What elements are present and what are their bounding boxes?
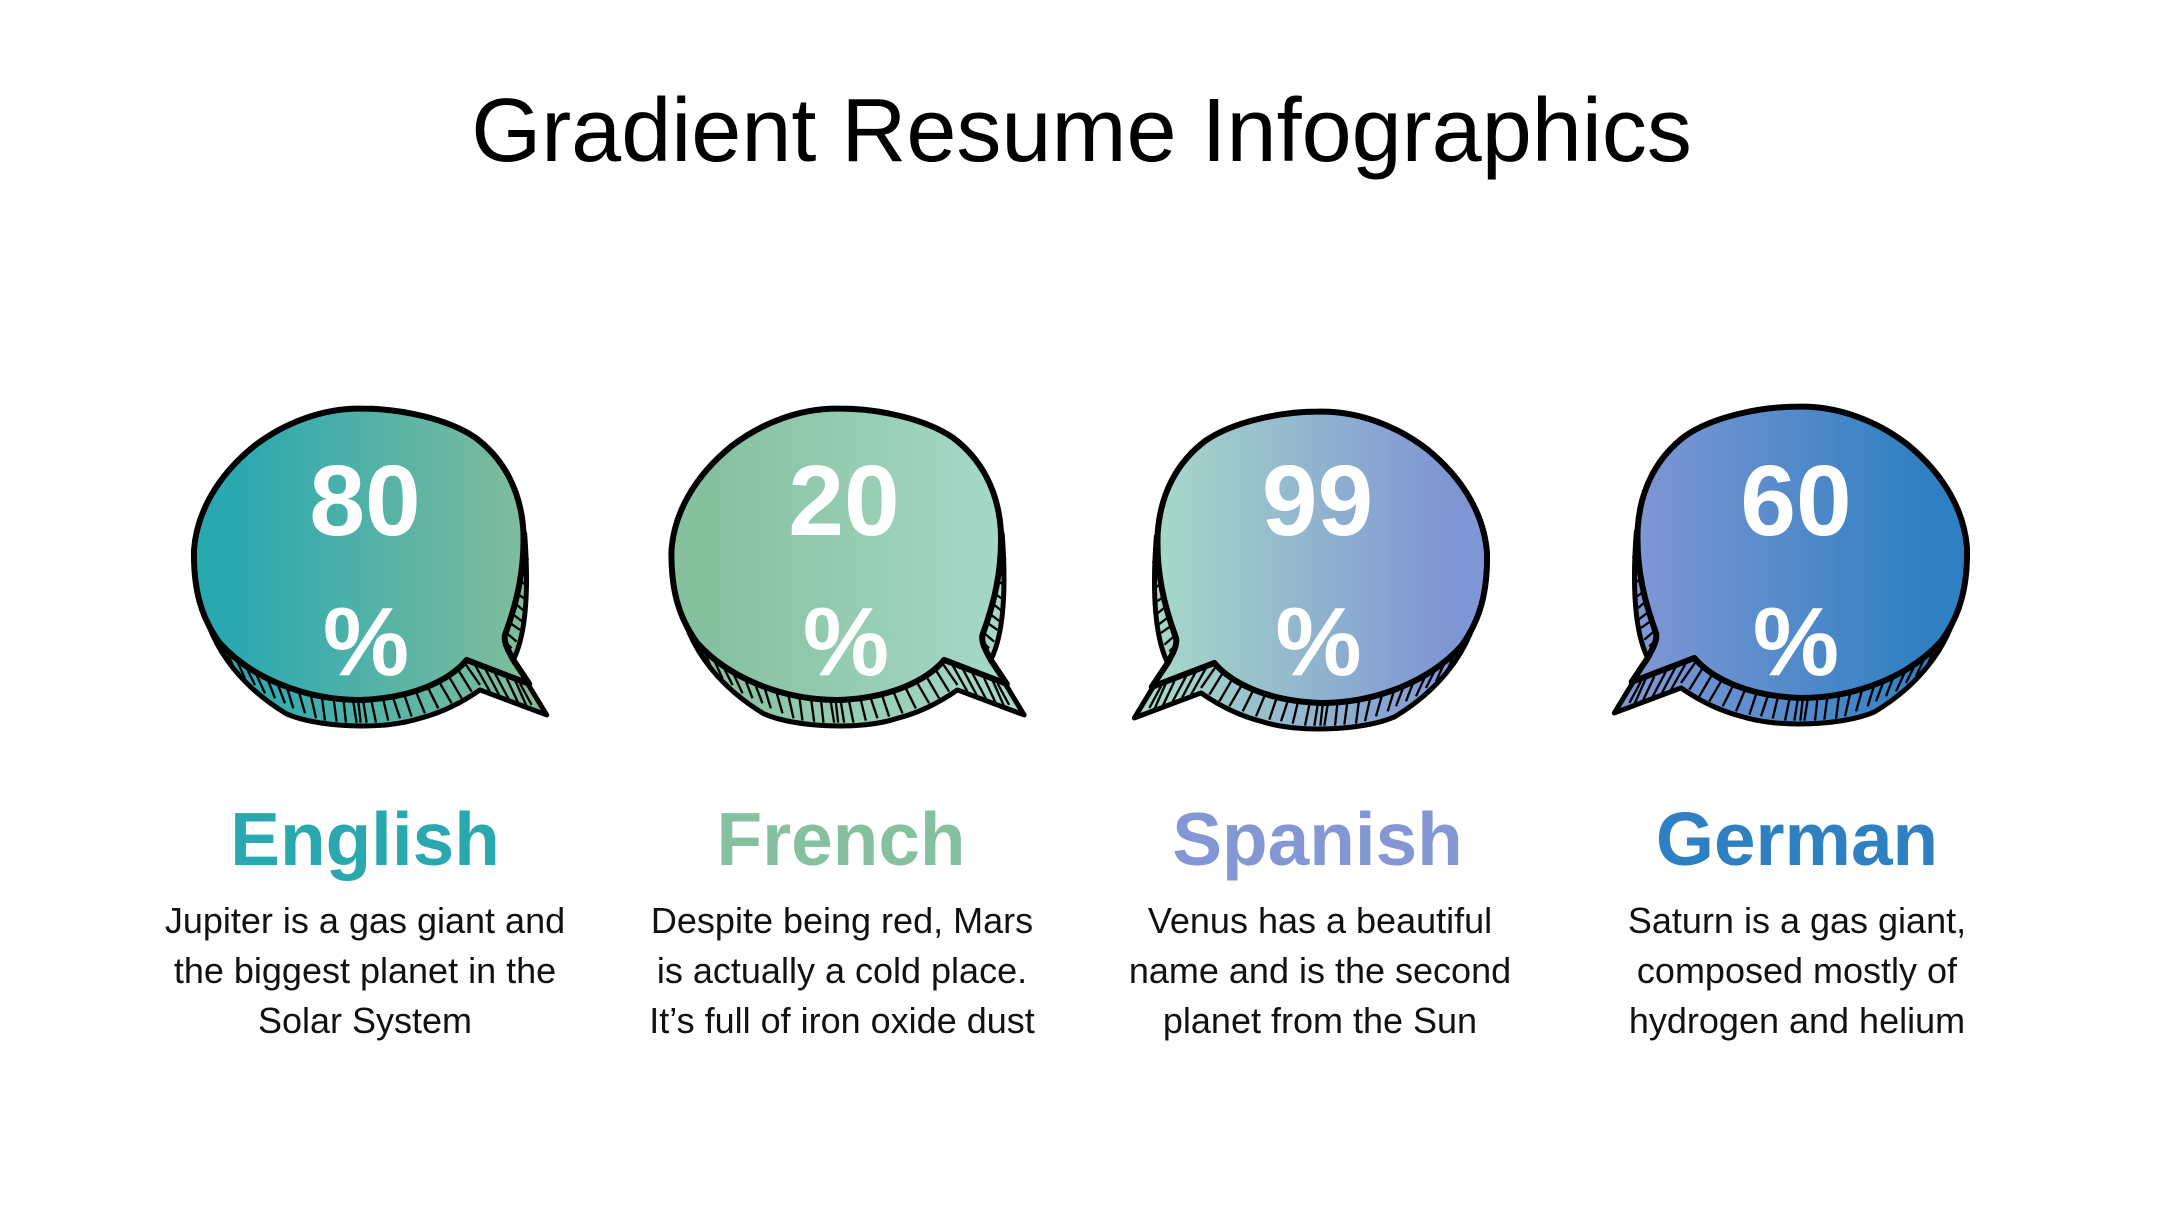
panel: Spanish: planet from the Sun — [1163, 1000, 1477, 1041]
panel: Spanish: Venus has a beautiful — [1148, 900, 1492, 941]
panel: Spanish: name and is the second — [1129, 950, 1511, 991]
panel: French: is actually a cold place. — [657, 950, 1027, 991]
value: 60%: % — [1753, 587, 1839, 696]
panel: Spanish: Spanish — [1172, 797, 1463, 881]
panel: English: Solar System — [258, 1000, 472, 1041]
panel: English: English — [230, 797, 500, 881]
panel: German: Saturn is a gas giant, — [1628, 900, 1966, 941]
panel: French: It’s full of iron oxide dust — [649, 1000, 1035, 1041]
value: 80%: % — [323, 587, 409, 696]
panel: German: hydrogen and helium — [1629, 1000, 1965, 1041]
speech bubble: English 80% — [194, 409, 547, 726]
panel: French: Despite being red, Mars — [651, 900, 1033, 941]
panel: French — [649, 797, 1035, 1041]
panel: English: the biggest planet in the — [174, 950, 556, 991]
value: 60%: 60 — [1740, 445, 1852, 557]
value: 80%: 80 — [309, 445, 421, 557]
panel: German: German — [1656, 797, 1938, 881]
panel: English — [165, 797, 565, 1041]
title: Gradient Resume Infographics — [471, 81, 1692, 181]
value: 99%: 99 — [1262, 445, 1373, 557]
value: 99%: % — [1275, 587, 1362, 696]
speech bubble: French 20% — [671, 409, 1024, 726]
panel: Spanish — [1129, 797, 1511, 1041]
panel: German — [1628, 797, 1966, 1041]
panel: French: French — [716, 797, 966, 881]
value: 20%: % — [803, 587, 889, 696]
speech bubble: German 60% — [1614, 407, 1967, 724]
speech bubble: Spanish 99% — [1134, 412, 1487, 729]
value: 20%: 20 — [788, 445, 900, 557]
panel: English: Jupiter is a gas giant and — [165, 900, 565, 941]
panel: German: composed mostly of — [1637, 950, 1957, 991]
